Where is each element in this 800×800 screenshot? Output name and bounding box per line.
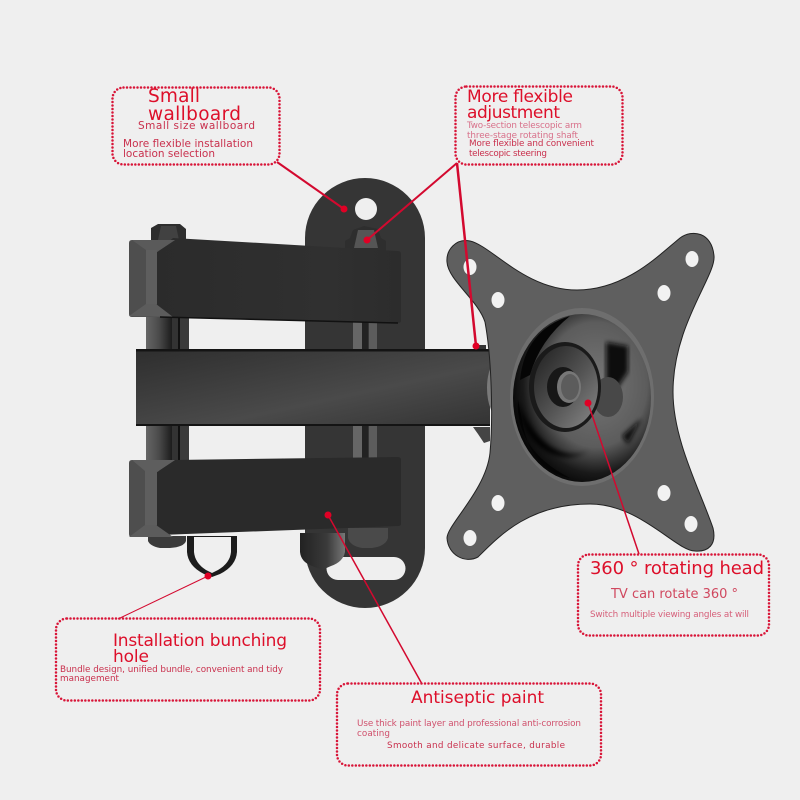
callout: small wallboard [112,86,280,164]
callout: antiseptic paint: Smooth and delicate surface, durable [387,741,565,751]
callout: 360 rotating head [578,554,769,636]
callout: antiseptic paint: Use thick paint layer and professional anti-corrosion [357,719,581,729]
mounting holes [464,251,698,546]
support posts [146,316,377,462]
callout: antiseptic paint: Antiseptic paint [411,688,544,708]
callout: more flexible adjustment: three-stage rotating shaft [467,131,579,141]
upper arm [129,238,401,323]
callout: more flexible adjustment: Two-section telescopic arm [466,121,582,131]
lower fittings [148,528,388,577]
middle arm [136,345,490,443]
callout: small wallboard: Small [148,86,200,107]
callout: small wallboard: location selection [123,148,215,160]
callout: installation bunching hole: Bundle design, unified bundle, convenient and tidy [60,665,283,675]
callout: small wallboard: wallboard [148,104,241,125]
swivel dish [510,308,654,486]
callout: antiseptic paint: coating [357,729,390,739]
callout: more flexible adjustment: telescopic steering [469,149,547,159]
callout: more flexible adjustment: adjustment [467,103,560,123]
callout: small wallboard: Small size wallboard [138,120,255,132]
callout: more flexible adjustment [456,86,622,164]
callout: 360 rotating head: Switch multiple viewing angles at will [590,610,749,620]
lower arm [129,457,401,537]
callout: 360 rotating head: 360 ° rotating head [590,558,764,579]
callout: more flexible adjustment: More flexible [467,87,573,107]
callout: small wallboard: More flexible installation [123,138,253,150]
wall plate [305,178,425,608]
callout: more flexible adjustment: More flexible and convenient [469,139,595,149]
VESA plate [447,233,714,559]
callout: installation bunching hole: Installation bunching [113,631,287,651]
top nuts [151,224,386,252]
callout: antiseptic paint [337,684,601,766]
callout lines [118,162,639,684]
callout: 360 rotating head: TV can rotate 360 ° [610,587,738,602]
callout: installation bunching hole: hole [113,647,149,667]
callout: installation bunching hole [56,618,320,700]
callout: installation bunching hole: management [60,674,120,684]
